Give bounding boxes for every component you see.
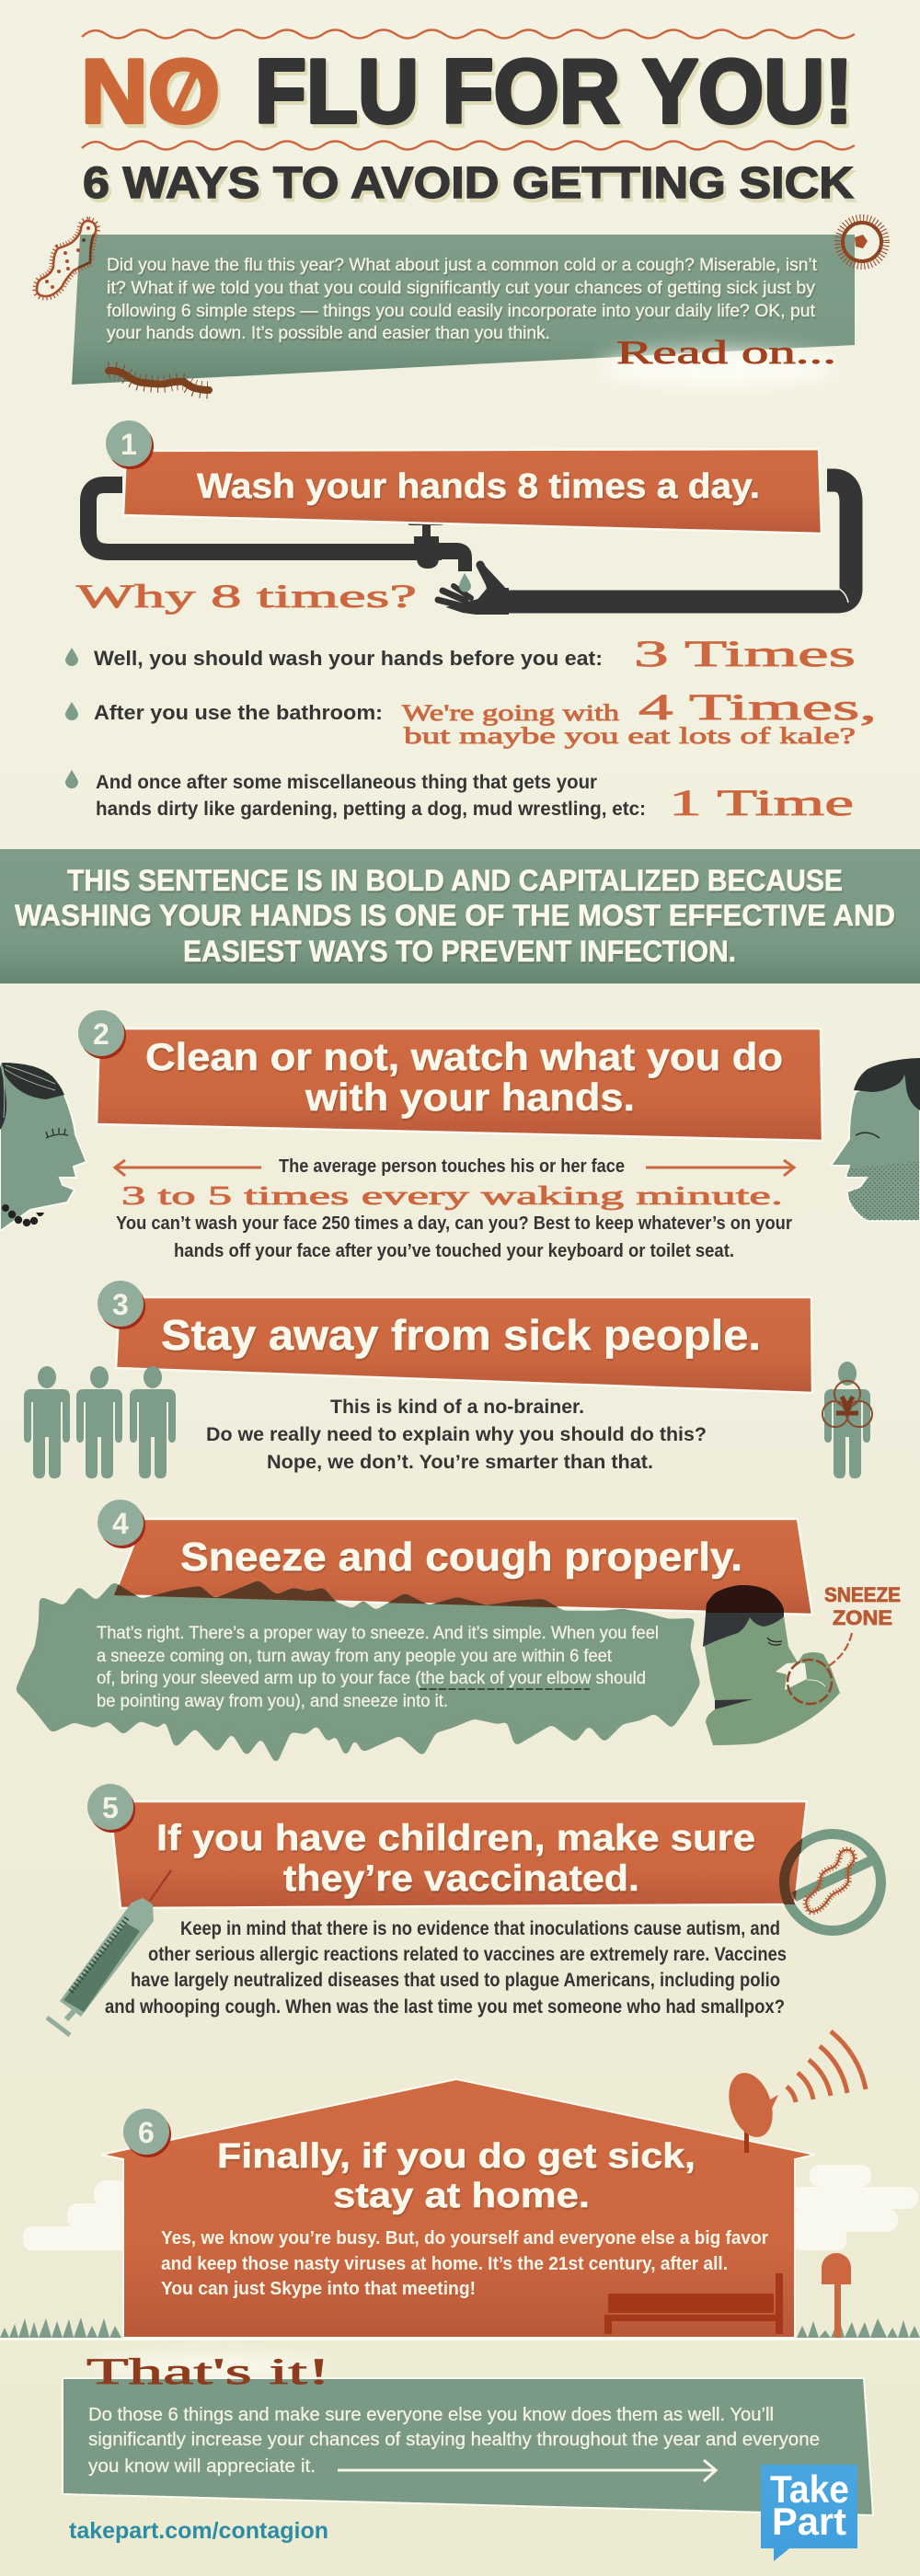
heading 5 bbox=[156, 1818, 755, 1899]
badge 1: 1 bbox=[121, 428, 137, 461]
conclusion text: Do those 6 things and make sure everyone else you know does them as well. You’ll bbox=[88, 2405, 774, 2425]
banner 2 bbox=[97, 1029, 822, 1141]
water drop bbox=[459, 573, 471, 592]
arrow: right bbox=[646, 1160, 794, 1176]
heading 6: stay at home. bbox=[333, 2177, 590, 2215]
list: reasons: hands dirty like gardening, petting a dog, mud wrestling, etc: bbox=[96, 799, 646, 820]
house text: Yes, we know you’re busy. But, do yourself and everyone else a big favor bbox=[161, 2228, 768, 2248]
pipe and arm right bbox=[497, 480, 851, 602]
conclusion text: you know will appreciate it. bbox=[88, 2456, 316, 2477]
badge 1 bbox=[106, 420, 154, 469]
title: No Flu For You!: NO bbox=[81, 40, 220, 142]
house text: and keep those nasty viruses at home. It’s the 21st century, after all. bbox=[161, 2254, 728, 2274]
sneeze zone marker bbox=[788, 1660, 832, 1704]
icon: hand and faucet bbox=[88, 480, 851, 614]
heading 6 bbox=[217, 2137, 696, 2215]
arrow: left bbox=[115, 1160, 261, 1176]
title: No Flu For You!: FLU FOR YOU! bbox=[255, 40, 853, 142]
banner 3 bbox=[116, 1297, 812, 1393]
badge 3: 3 bbox=[112, 1288, 129, 1321]
text: step 5: other serious allergic reactions related to vaccines are extremely rare. Vaccines bbox=[148, 1944, 787, 1965]
text: face touching: 3 to 5 times every waking minute. bbox=[121, 1181, 783, 1211]
callout: read on: Read on... bbox=[616, 334, 836, 371]
list: reasons: 4 Times, bbox=[638, 686, 877, 728]
icon: bed bbox=[604, 2273, 783, 2334]
heading 5: they’re vaccinated. bbox=[283, 1858, 639, 1899]
text: face touching: hands off your face after you’ve touched your keyboard or toilet seat. bbox=[174, 1241, 734, 1261]
badge 4 bbox=[98, 1500, 145, 1548]
text: step 3 bbox=[206, 1397, 707, 1473]
text: step 3: This is kind of a no-brainer. bbox=[330, 1397, 584, 1418]
banner 5 bbox=[112, 1801, 807, 1908]
text: step 5: have largely neutralized diseases that used to plague Americans, including polio bbox=[131, 1970, 780, 1991]
heading 3: Stay away from sick people. bbox=[161, 1311, 761, 1359]
icon: sneezing person bbox=[703, 1585, 852, 1745]
list: reasons: Well, you should wash your hands before you eat: bbox=[94, 647, 603, 670]
house text bbox=[161, 2228, 768, 2299]
text: face touching: You can’t wash your face 250 times a day, can you? Best to keep whatever’s on your bbox=[116, 1213, 792, 1234]
panel: green band bbox=[0, 849, 920, 983]
logo: TakePart: Take bbox=[770, 2467, 849, 2511]
heading 2: with your hands. bbox=[305, 1075, 635, 1119]
icon: woman head bbox=[0, 1063, 86, 1230]
arrow bbox=[338, 2460, 716, 2481]
badge 6: 6 bbox=[138, 2116, 155, 2149]
decorative wave bottom bbox=[82, 142, 855, 149]
mailbox bbox=[822, 2253, 851, 2338]
list: reasons: but maybe you eat lots of kale? bbox=[404, 724, 856, 749]
intro text: Did you have the flu this year? What about just a common cold or a cough? Miserable, isn’t bbox=[107, 256, 818, 275]
panel: intro bbox=[72, 235, 855, 385]
house text: You can just Skype into that meeting! bbox=[161, 2279, 476, 2299]
callout: read on bbox=[598, 334, 837, 386]
splatter text: be pointing away from you), and sneeze into it. bbox=[97, 1692, 448, 1711]
badge 2 bbox=[78, 1010, 126, 1059]
text: step 5: and whooping cough. When was the last time you met someone who had smallpox? bbox=[105, 1996, 785, 2018]
text: step 5 bbox=[105, 1918, 787, 2018]
list: reasons: 3 Times bbox=[634, 633, 856, 674]
conclusion text: significantly increase your chances of staying healthy throughout the year and everyone bbox=[88, 2430, 820, 2450]
panel: conclusion bbox=[63, 2353, 873, 2515]
list: reasons: We're going with bbox=[402, 701, 620, 726]
conclusion text bbox=[88, 2405, 820, 2477]
heading 1: Wash your hands 8 times a day. bbox=[197, 467, 760, 506]
badge 2: 2 bbox=[93, 1018, 109, 1051]
intro text: following 6 simple steps — things you could easily incorporate into your daily life? OK, put bbox=[107, 302, 816, 321]
text: face touching: The average person touches his or her face bbox=[279, 1156, 625, 1177]
subtitle: 6 WAYS TO AVOID GETTING SICK bbox=[83, 159, 854, 208]
intro text: it? What if we told you that you could significantly cut your chances of getting sick just by bbox=[107, 279, 816, 298]
icon: germ right bbox=[839, 219, 885, 265]
badge 3 bbox=[98, 1281, 145, 1329]
clouds bbox=[23, 2165, 918, 2250]
text: step 3: Nope, we don’t. You’re smarter than that. bbox=[267, 1452, 653, 1473]
list: reasons: 1 Time bbox=[669, 782, 854, 823]
hand bbox=[438, 563, 508, 614]
logo: TakePart bbox=[761, 2465, 857, 2561]
icon: worm bbox=[109, 371, 209, 390]
decorative wave top bbox=[82, 29, 855, 39]
list: reasons: After you use the bathroom: bbox=[94, 701, 383, 724]
icon: syringe bbox=[47, 1870, 171, 2035]
heading 2 bbox=[145, 1035, 783, 1119]
intro text bbox=[107, 256, 818, 343]
badge 5: 5 bbox=[102, 1791, 119, 1824]
band text: THIS SENTENCE IS IN BOLD AND CAPITALIZED BECAUSE bbox=[67, 864, 843, 897]
badge 4: 4 bbox=[112, 1507, 129, 1540]
splatter text: a sneeze coming on, turn away from any people you are within 6 feet bbox=[97, 1647, 613, 1666]
icon: man head bbox=[831, 1058, 920, 1221]
icon: healthy people bbox=[24, 1366, 176, 1478]
text: step 3: Do we really need to explain why you should do this? bbox=[206, 1424, 707, 1445]
band text: WASHING YOUR HANDS IS ONE OF THE MOST EFFECTIVE AND bbox=[15, 899, 895, 932]
list: reasons bbox=[65, 633, 877, 823]
subheading: why 8 times: Why 8 times? bbox=[76, 578, 417, 615]
pipe left bbox=[88, 485, 442, 552]
icon: germ left bbox=[37, 221, 96, 296]
text: face touching bbox=[116, 1156, 792, 1261]
grass bbox=[0, 2317, 920, 2338]
band text bbox=[15, 864, 895, 968]
banner 4 bbox=[114, 1519, 812, 1615]
text: step 5: Keep in mind that there is no evidence that inoculations cause autism, and bbox=[180, 1918, 780, 1939]
splatter text bbox=[97, 1624, 659, 1711]
label: sneeze zone: SNEEZE bbox=[824, 1583, 901, 1606]
heading 2: Clean or not, watch what you do bbox=[145, 1035, 783, 1078]
banner 1 bbox=[123, 449, 822, 534]
icon: sick person with biohazard bbox=[822, 1362, 872, 1478]
label: sneeze zone: ZONE bbox=[833, 1606, 892, 1629]
icon: no germs sign bbox=[784, 1834, 881, 1930]
ground line bbox=[0, 2338, 920, 2340]
panel: sneeze splatter bbox=[17, 1582, 698, 1761]
badge 6 bbox=[123, 2109, 171, 2157]
intro text: your hands down. It’s possible and easier than you think. bbox=[107, 324, 550, 343]
heading: that's it: That's it! bbox=[86, 2351, 330, 2392]
heading 5: If you have children, make sure bbox=[156, 1818, 755, 1858]
faucet bbox=[408, 518, 472, 571]
panel: house bbox=[101, 2079, 815, 2338]
logo: TakePart: Part bbox=[772, 2500, 846, 2543]
badge 5 bbox=[87, 1784, 135, 1833]
icon: satellite dish bbox=[721, 2031, 866, 2153]
splatter text: That’s right. There’s a proper way to sneeze. And it’s simple. When you feel bbox=[97, 1624, 659, 1643]
list: reasons: And once after some miscellaneous thing that gets your bbox=[96, 772, 597, 793]
label: sneeze zone bbox=[824, 1583, 901, 1629]
heading 6: Finally, if you do get sick, bbox=[217, 2137, 696, 2176]
link: takepart.com/contagion: takepart.com/contagion bbox=[69, 2518, 328, 2544]
heading 4: Sneeze and cough properly. bbox=[180, 1535, 742, 1580]
band text: EASIEST WAYS TO PREVENT INFECTION. bbox=[183, 935, 736, 968]
splatter text: of, bring your sleeved arm up to your face (the back of your elbow should bbox=[97, 1669, 646, 1688]
